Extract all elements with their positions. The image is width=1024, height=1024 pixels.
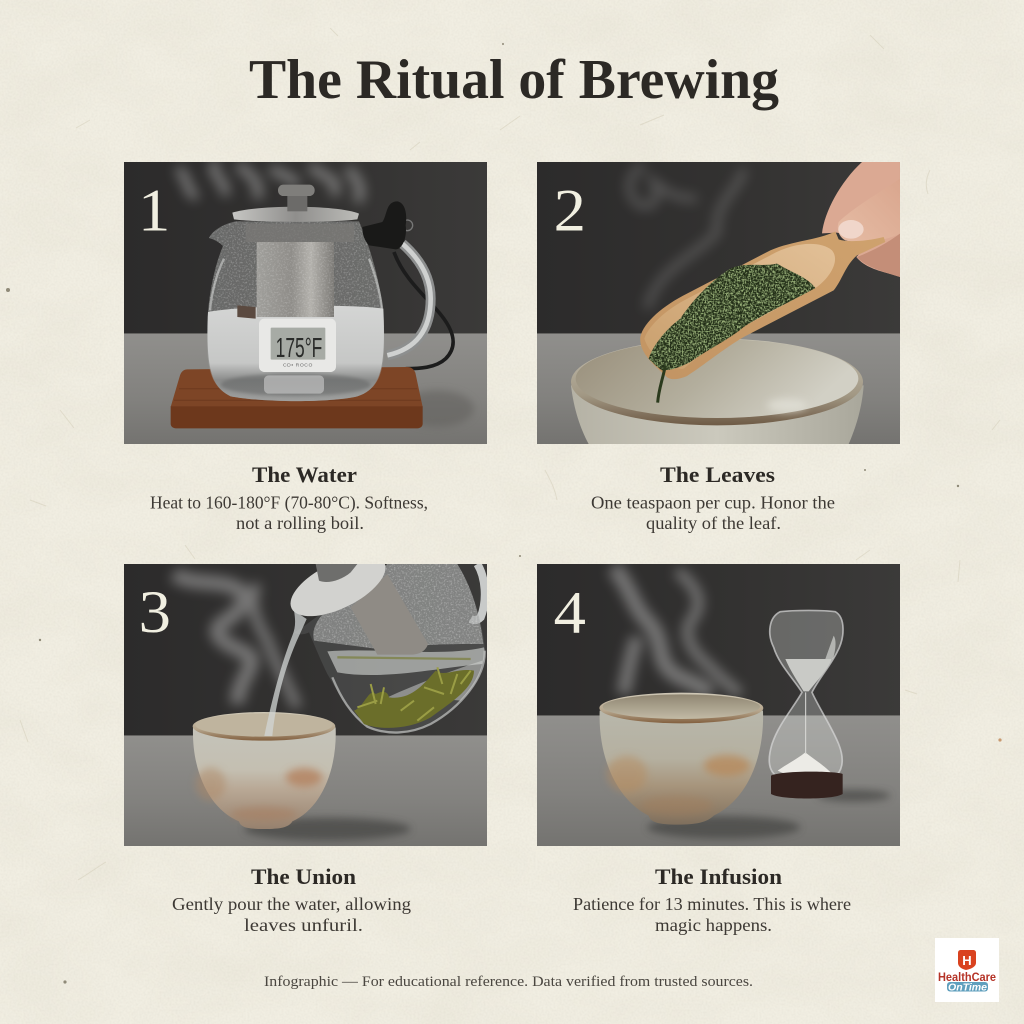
lid bbox=[290, 564, 386, 616]
description: Patience for 13 minutes. This is where bbox=[573, 894, 851, 914]
cup shadow bbox=[244, 818, 411, 840]
lid bbox=[232, 185, 359, 222]
ceramic bowl bbox=[571, 339, 864, 444]
board shadow bbox=[420, 390, 474, 426]
numeral 3: 3 bbox=[139, 579, 171, 645]
numeral 4: 4 bbox=[554, 579, 586, 645]
panel: step 2 the leaves photo bbox=[537, 162, 900, 444]
description bbox=[172, 894, 411, 935]
heading: The Leaves bbox=[660, 462, 775, 487]
steam bbox=[177, 162, 360, 202]
caption: the leaves bbox=[591, 462, 835, 533]
wooden scoop bbox=[640, 231, 885, 379]
steam bbox=[174, 574, 297, 707]
numeral 2: 2 bbox=[554, 177, 586, 243]
heading: The Union bbox=[251, 864, 356, 889]
description bbox=[150, 492, 428, 533]
wooden board bbox=[171, 367, 423, 428]
digital thermometer 175 F: CD▪ ROCO bbox=[283, 362, 312, 368]
description: magic happens. bbox=[655, 915, 772, 935]
green tea leaves bbox=[649, 264, 815, 403]
infuser bbox=[246, 224, 354, 317]
black handle clip bbox=[362, 201, 413, 249]
digital thermometer 175 F: 175°F bbox=[276, 332, 322, 363]
description: Gently pour the water, allowing bbox=[172, 894, 411, 914]
cord bbox=[394, 252, 453, 369]
description: Heat to 160-180°F (70-80°C). Softness, bbox=[150, 492, 428, 514]
panel: step 4 the infusion photo bbox=[537, 564, 900, 846]
numeral 1: 1 bbox=[138, 177, 170, 243]
heading: The Infusion bbox=[655, 864, 782, 889]
glass handle bbox=[387, 244, 431, 355]
caption: the water bbox=[150, 462, 428, 533]
heading: The Water bbox=[252, 462, 357, 487]
caption: the infusion bbox=[573, 864, 851, 935]
description: One teaspaon per cup. Honor the bbox=[591, 492, 835, 512]
description: quality of the leaf. bbox=[646, 513, 781, 533]
steam bbox=[614, 567, 740, 694]
infuser bbox=[351, 574, 428, 655]
icon: red H badge: H bbox=[962, 953, 972, 968]
footer note: Infographic — For educational reference. Data verified from trusted sources. bbox=[264, 974, 753, 990]
title: The Ritual of Brewing bbox=[249, 49, 779, 111]
digital thermometer 175 F bbox=[259, 319, 336, 372]
water stream bbox=[264, 611, 307, 736]
description bbox=[573, 894, 851, 935]
shadows bbox=[647, 816, 800, 839]
OnTime badge: OnTime bbox=[948, 982, 987, 994]
hand bbox=[822, 162, 900, 277]
steam bbox=[629, 165, 744, 309]
ceramic cup bbox=[599, 693, 763, 825]
tilted teapot bbox=[294, 564, 485, 733]
description: not a rolling boil. bbox=[236, 513, 364, 533]
description bbox=[591, 492, 835, 533]
panel: step 3 the union photo bbox=[124, 543, 487, 846]
caption: the union bbox=[172, 864, 411, 935]
hourglass bbox=[769, 610, 890, 802]
steeped leaves bbox=[337, 657, 474, 728]
logo: HealthCare OnTime: HealthCare bbox=[938, 970, 996, 984]
panel: step 1 the water photo bbox=[124, 162, 487, 444]
glass handle bbox=[471, 564, 485, 620]
ceramic cup bbox=[193, 712, 336, 829]
kettle body bbox=[207, 221, 384, 401]
logo: HealthCare OnTime bbox=[935, 938, 999, 1002]
description: leaves unfuril. bbox=[244, 915, 363, 935]
